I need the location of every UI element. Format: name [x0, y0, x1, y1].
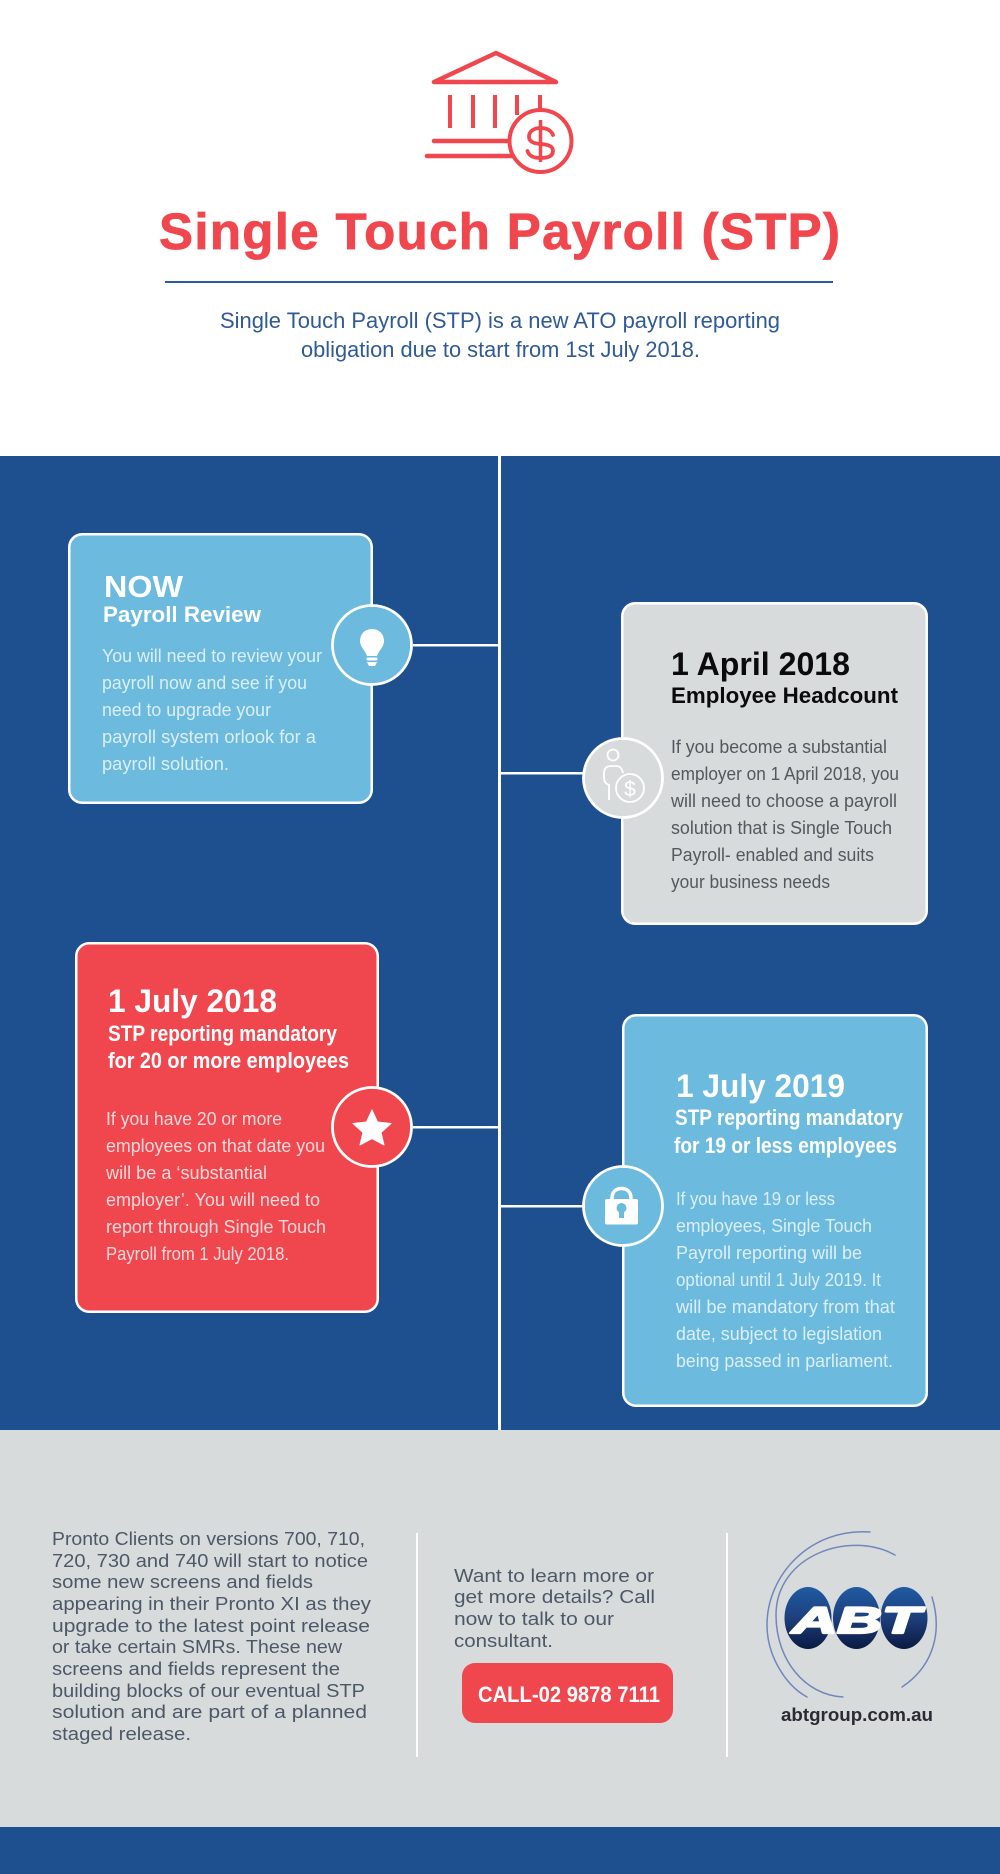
panel: NOW payroll review: [69, 534, 412, 803]
body text: Payroll reporting will be: [676, 1243, 862, 1263]
footer text: Pronto clients: upgrade to the latest point release: [52, 1616, 370, 1636]
timeline vertical line: [498, 456, 501, 1430]
footer text: Pronto clients: staged release.: [52, 1724, 191, 1744]
footer text: Pronto clients: building blocks of our eventual STP: [52, 1681, 365, 1701]
body text: If you have 19 or less: [676, 1189, 835, 1209]
footer text: call to action: get more details? Call: [454, 1587, 655, 1607]
body text: employees, Single Touch: [676, 1216, 872, 1236]
subheading: STP reporting mandatory for 19 or less employees: [674, 1105, 904, 1158]
footer text: call to action: now to talk to our: [454, 1609, 614, 1629]
subheading: Employee Headcount: Employee Headcount: [671, 683, 899, 708]
heading: NOW: NOW: [104, 569, 184, 604]
body text: employees on that date you: [106, 1136, 325, 1156]
intro text: [220, 308, 780, 362]
subheading: STP reporting mandatory for 19 or less employees: for 19 or less employees: [674, 1133, 897, 1158]
icon: star: [332, 1088, 412, 1166]
icon: padlock: [584, 1166, 662, 1246]
subheading: STP reporting mandatory for 19 or less employees: STP reporting mandatory: [675, 1105, 904, 1130]
panel: footer: [0, 1430, 1000, 1827]
body text: report through Single Touch: [106, 1217, 326, 1237]
body text: will need to choose a payroll: [670, 791, 897, 811]
panel: 1 April 2018 employee headcount: [584, 603, 927, 924]
body text: being passed in parliament.: [676, 1351, 893, 1371]
subheading: Payroll Review: Payroll Review: [103, 602, 262, 627]
logo: ABT: [767, 1532, 936, 1725]
footer text: Pronto clients: some new screens and fields: [52, 1572, 313, 1592]
timeline connector lines: [413, 644, 583, 1208]
panel: 1 July 2019 mandatory for 19 or less: [584, 1015, 927, 1406]
body text: If you have 20 or more: [106, 1109, 282, 1129]
footer text: Pronto clients: Pronto Clients on versions 700, 710,: [52, 1529, 365, 1549]
footer text: Pronto clients: or take certain SMRs. These new: [52, 1637, 343, 1657]
body text: employer’. You will need to: [106, 1190, 320, 1210]
footer text: call to action: Want to learn more or: [454, 1566, 654, 1586]
body text: optional until 1 July 2019. It: [676, 1270, 881, 1290]
icon: person with dollar coin: [584, 738, 662, 818]
title rule: [165, 281, 833, 283]
intro text: Single Touch Payroll (STP) is a new ATO payroll reporting: [220, 308, 780, 333]
footer text: Pronto clients: 720, 730 and 740 will start to notice: [52, 1551, 368, 1571]
body text: If you become a substantial: [671, 737, 887, 757]
logo: ABT: ABT: [790, 1600, 926, 1641]
footer dividers: [416, 1533, 728, 1757]
footer text: Pronto clients: [52, 1529, 371, 1744]
body text: will be a ‘substantial: [105, 1163, 267, 1183]
body text: You will need to review your: [102, 646, 322, 666]
footer text: call to action: consultant.: [454, 1631, 553, 1651]
body text: solution that is Single Touch: [671, 818, 892, 838]
body text: payroll solution.: [102, 754, 229, 774]
subheading: STP reporting mandatory for 20 or more employees: STP reporting mandatory: [108, 1021, 338, 1046]
panel: 1 July 2018 mandatory for 20 or more: [76, 943, 412, 1312]
panel: timeline background: [0, 456, 1000, 1430]
footer text: Pronto clients: screens and fields represent the: [52, 1659, 340, 1679]
body text: [675, 1189, 895, 1371]
logo text: website: abtgroup.com.au: [781, 1705, 933, 1725]
heading: 1 April 2018: 1 April 2018: [671, 646, 850, 682]
subheading: STP reporting mandatory for 20 or more employees: for 20 or more employees: [108, 1048, 349, 1073]
title: Single Touch Payroll (STP): [159, 203, 840, 260]
body text: [670, 737, 899, 892]
footer text: Pronto clients: appearing in their Pronto XI as they: [52, 1594, 371, 1614]
icon: light bulb: [332, 606, 412, 684]
subheading: STP reporting mandatory for 20 or more employees: [108, 1021, 349, 1073]
body text: payroll system orlook for a: [102, 727, 317, 747]
heading: 1 July 2019: 1 July 2019: [676, 1068, 845, 1104]
header icon: bank with dollar coin: [427, 53, 572, 172]
heading: 1 July 2018: 1 July 2018: [108, 983, 277, 1019]
body text: Payroll from 1 July 2018.: [106, 1244, 289, 1264]
body text: [105, 1109, 326, 1264]
icon: person with dollar coin: $: [624, 778, 636, 801]
body text: Payroll- enabled and suits: [671, 845, 874, 865]
body text: your business needs: [671, 872, 830, 892]
body text: need to upgrade your: [102, 700, 271, 720]
body text: [102, 646, 322, 774]
footer text: call to action: [454, 1566, 655, 1651]
call button: CALL-02 9878 7111: [478, 1682, 660, 1707]
body text: will be mandatory from that: [675, 1297, 895, 1317]
bottom band: [0, 1827, 1000, 1874]
body text: employer on 1 April 2018, you: [671, 764, 899, 784]
call button: [462, 1663, 673, 1723]
intro text: obligation due to start from 1st July 2018.: [301, 337, 700, 362]
body text: date, subject to legislation: [676, 1324, 882, 1344]
body text: payroll now and see if you: [102, 673, 307, 693]
footer text: Pronto clients: solution and are part of a planned: [52, 1702, 367, 1722]
